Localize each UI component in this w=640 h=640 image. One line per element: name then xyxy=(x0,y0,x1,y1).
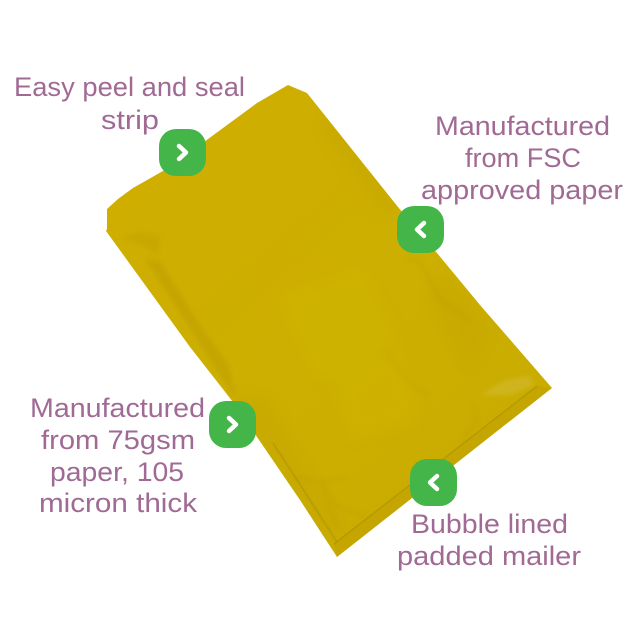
label: bubble lined mailer xyxy=(397,509,581,571)
label: peel and seal strip xyxy=(14,72,245,135)
yellow padded mailer xyxy=(106,85,552,557)
label: FSC approved paper xyxy=(421,111,623,205)
flap fold shadow xyxy=(120,232,160,255)
label: bubble lined mailer: Bubble lined xyxy=(411,509,568,539)
label: FSC approved paper: approved paper xyxy=(421,175,623,205)
bottom edge band xyxy=(334,386,552,557)
icon: left arrow button bottom xyxy=(410,459,457,506)
lower creases xyxy=(295,405,478,530)
label: 75gsm paper: micron thick xyxy=(39,488,198,518)
label: bubble lined mailer: padded mailer xyxy=(397,541,581,571)
crease from right button xyxy=(408,258,470,320)
label: 75gsm paper: Manufactured xyxy=(30,393,205,423)
icon: right arrow button top xyxy=(159,129,206,176)
label: FSC approved paper: from FSC xyxy=(465,143,581,173)
infographic xyxy=(16,76,622,570)
icon: right arrow button bottom xyxy=(209,401,256,448)
mailer shading xyxy=(150,130,552,557)
mailer glare xyxy=(480,375,535,395)
label: 75gsm paper xyxy=(30,393,205,518)
label: 75gsm paper: from 75gsm xyxy=(41,425,195,455)
left seam shadow xyxy=(150,262,230,383)
label: FSC approved paper: Manufactured xyxy=(435,111,610,141)
label: peel and seal strip: strip xyxy=(101,105,159,135)
label: 75gsm paper: paper, 105 xyxy=(50,457,184,487)
lower left seam xyxy=(273,443,337,542)
icon: left arrow button top xyxy=(397,206,444,253)
label: peel and seal strip: Easy peel and seal xyxy=(14,72,245,102)
